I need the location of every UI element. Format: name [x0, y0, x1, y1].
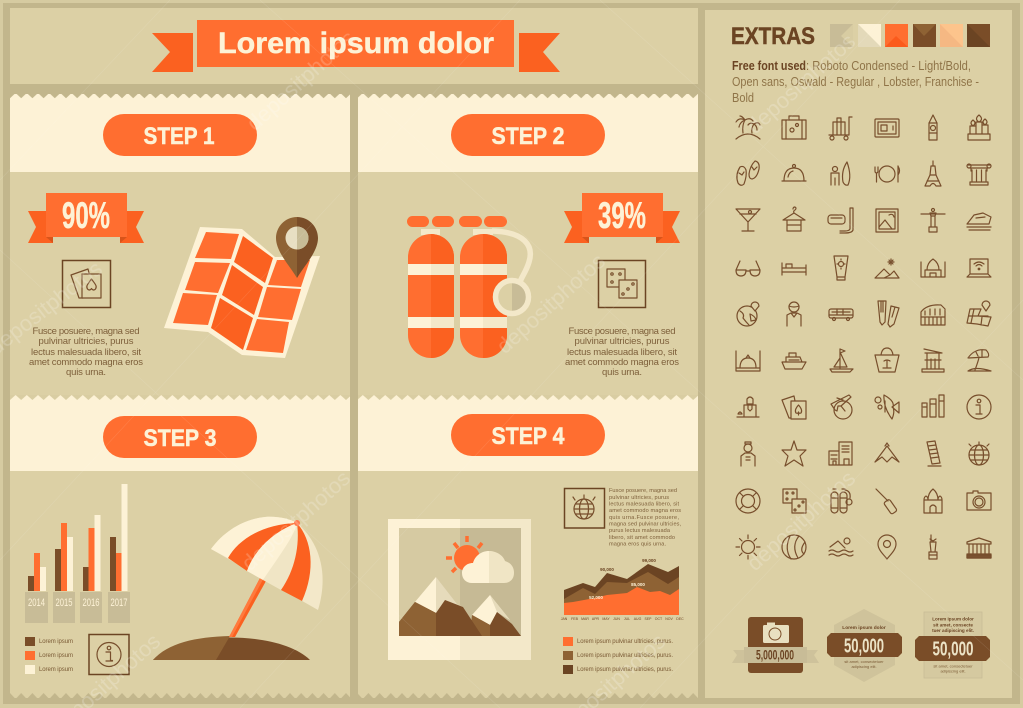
icon: dice box	[598, 260, 646, 308]
text block step 4: amet commodo magna eros	[609, 508, 681, 514]
icon: globe box	[564, 488, 604, 528]
umbrella illustration	[153, 517, 323, 660]
icon: playing cards box	[62, 260, 110, 308]
icon: lifebuoy	[736, 489, 760, 513]
map pin	[276, 217, 318, 278]
colour swatches	[830, 24, 990, 47]
icon: reception	[737, 397, 759, 417]
body text 1: pulvinar ultricies, purus	[38, 336, 134, 347]
body text 2: quis urna.	[602, 367, 642, 378]
badge: hexagon 50,000: sit amet, consectetuer	[844, 659, 884, 664]
chart legend: Lorem ipsum	[39, 667, 73, 673]
step 4 label: STEP 4	[492, 423, 565, 450]
free font note: Free font used	[732, 58, 806, 73]
cloud	[462, 551, 514, 583]
step 2 pill	[451, 114, 605, 156]
zigzag edges	[10, 84, 698, 704]
free font note: Bold	[732, 90, 754, 105]
area chart: JUL	[624, 617, 630, 621]
text block step 4: Fusce posuere, magna sed	[609, 488, 677, 494]
area chart legend	[563, 637, 673, 674]
icon: diving fins	[878, 301, 899, 327]
body text 2: pulvinar ultricies, purus	[574, 336, 670, 347]
icon: statue of liberty	[929, 535, 937, 559]
badge: camera 5,000,000: 5,000,000	[756, 646, 794, 662]
icon: leaning tower	[927, 441, 941, 466]
watermark: depositphotos	[742, 465, 860, 576]
area chart: AUG	[634, 617, 642, 621]
panel: step 1	[10, 94, 350, 398]
area chart: 90,000	[600, 567, 614, 572]
text block step 4: purus lectus malesuada	[609, 528, 671, 534]
ribbon 39%	[564, 193, 680, 243]
icon: plate and cutlery	[875, 166, 900, 182]
icon: big ben	[929, 115, 937, 140]
area chart: FEB	[571, 617, 579, 621]
body text 2: lectus malesuada libero, sit	[567, 347, 677, 358]
icon: concierge	[787, 302, 801, 326]
icon: colosseum	[921, 305, 945, 325]
badge: square 50,000: sit amet, consecte	[933, 622, 973, 628]
badge: square 50,000: sit amet, consectetuer	[933, 664, 973, 668]
step 4 pill	[451, 414, 605, 456]
watermark: depositphotos	[237, 465, 355, 576]
icon: tent	[875, 443, 899, 462]
body text 1	[29, 326, 143, 378]
icon: bellhop	[741, 442, 755, 466]
text block step 4: magna eros quis urna.	[609, 542, 666, 548]
watermark: depositphotos	[492, 248, 610, 359]
bar chart	[25, 484, 130, 623]
badge: camera 5,000,000	[732, 617, 819, 673]
title ribbon right tail	[519, 33, 560, 72]
icon: snorkel	[828, 208, 853, 233]
badge: hexagon 50,000: adipiscing elit.	[851, 664, 877, 669]
badge: hexagon 50,000: 50,000	[844, 636, 884, 658]
icon: playing cards	[782, 396, 806, 419]
badge: square 50,000: 50,000	[932, 638, 974, 660]
icon: swimmer	[829, 538, 853, 556]
icon: camera	[967, 491, 991, 510]
icon: martini	[736, 209, 760, 231]
text block step 4: magna sed pulvinar ultricies,	[609, 522, 681, 528]
area chart: OCT	[655, 617, 663, 621]
icon: info box	[89, 634, 129, 674]
icon: cruise ship	[782, 353, 806, 369]
island	[153, 638, 310, 660]
icon: eiffel tower	[925, 161, 941, 186]
icon: parthenon	[967, 538, 991, 558]
icon: taj mahal	[921, 259, 945, 277]
icon: ionic column	[967, 164, 991, 185]
icon: onion domes	[968, 115, 990, 140]
badge: square 50,000: adipiscing elit.	[940, 668, 966, 674]
body text 2: Fusce posuere, magna sed	[568, 326, 676, 337]
free font note	[732, 58, 979, 105]
icon: person with surfboard	[831, 162, 850, 185]
icon: beach umbrella	[968, 350, 991, 371]
icon: dice	[783, 489, 806, 513]
body text 1: lectus malesuada libero, sit	[31, 347, 141, 358]
camera glyph	[763, 622, 789, 643]
badge: hexagon 50,000	[827, 609, 902, 682]
area chart legend: Lorem ipsum pulvinar ultricies, purus.	[577, 667, 673, 673]
badge: hexagon 50,000: Lorem ipsum dolor	[842, 625, 886, 631]
step 3 pill	[103, 416, 257, 458]
icon: flip flops	[737, 161, 759, 185]
area chart: JUN	[613, 617, 620, 621]
icon: sailboat	[830, 349, 853, 372]
area chart: NOV	[665, 617, 673, 621]
ribbon 39%: 39%	[598, 195, 646, 236]
body text 1: Fusce posuere, magna sed	[32, 326, 140, 337]
area chart	[561, 558, 684, 621]
step 2 label: STEP 2	[492, 123, 564, 150]
badge: square 50,000: tuer adipiscing elit.	[932, 628, 974, 633]
title: Lorem ipsum dolor	[218, 27, 494, 60]
badge: square 50,000	[915, 612, 990, 678]
photo illustration	[388, 519, 531, 660]
text block step 4: libero, sit amet commodo	[609, 535, 675, 541]
free font note: Open sans, Oswald - Regular , Lobster, Franchise -	[732, 74, 979, 89]
area chart: 99,000	[642, 558, 656, 563]
body text 1: amet commodo magna eros	[29, 357, 143, 368]
panel: step 2	[358, 94, 698, 398]
chart legend: Lorem ipsum	[39, 653, 73, 659]
icon: mosque	[736, 351, 760, 371]
icon: luggage cart	[829, 117, 852, 140]
step 1 label: STEP 1	[144, 123, 214, 150]
title ribbon left tail	[152, 33, 193, 72]
text block step 4	[609, 488, 681, 548]
bar chart: 2015	[56, 597, 72, 609]
icon: picture frame	[876, 209, 898, 232]
area chart: APR	[592, 617, 600, 621]
title banner	[197, 20, 514, 67]
body text 1: quis urna.	[66, 367, 106, 378]
text block step 4: lectus malesuada libero, sit	[609, 502, 679, 508]
text block step 4: quis urna.Fusce posuere,	[609, 515, 679, 521]
step 3 label: STEP 3	[144, 425, 216, 452]
canopy	[211, 517, 323, 610]
icon: christ statue	[921, 208, 945, 232]
step 1 pill	[103, 114, 257, 156]
icon: roller suitcase	[876, 489, 897, 514]
scuba tanks illustration	[407, 216, 530, 358]
bar chart: 2014	[28, 597, 45, 609]
watermark: depositphotos	[242, 25, 360, 136]
panel: step 4	[358, 395, 698, 704]
badge: square 50,000: Lorem ipsum dolor	[932, 616, 974, 622]
panel: step 3	[10, 395, 350, 704]
panel: extras	[705, 10, 1012, 698]
chart legend	[25, 637, 73, 674]
icon: beach ball	[782, 535, 806, 559]
area chart: MAY	[602, 617, 610, 621]
icon: palm island	[736, 116, 760, 139]
icon: location pin	[878, 535, 896, 559]
icon: towel hanger	[783, 207, 805, 231]
icon: sun	[736, 535, 760, 559]
body text 2: amet commodo magna eros	[565, 357, 679, 368]
area chart: JAN	[561, 617, 568, 621]
area chart legend: Lorem ipsum pulvinar ultricies, purus.	[577, 653, 673, 659]
bar chart: 2017	[110, 597, 128, 609]
icon: cloche	[782, 164, 806, 181]
icon: bed	[782, 263, 806, 275]
icon: domed castle	[924, 489, 942, 513]
icon: laptop	[967, 259, 991, 277]
icon: plane over globe	[831, 395, 852, 419]
area chart: 85,000	[631, 582, 645, 587]
mountains	[399, 577, 521, 636]
free font note: : Roboto Condensed - Light/Bold,	[806, 58, 971, 73]
icon: torii	[922, 349, 944, 372]
text block step 4: pulvinar ultricies, purus	[609, 495, 669, 501]
icon: starfish	[782, 441, 806, 466]
area chart: 52,000	[589, 595, 603, 600]
body text 2	[565, 326, 679, 378]
icon: yacht	[967, 213, 991, 230]
icon: sunscreen	[834, 256, 848, 280]
ribbon 90%	[28, 193, 144, 243]
bar chart: 2016	[82, 597, 100, 609]
icon: fish	[875, 395, 899, 419]
hose and gauge	[492, 231, 530, 314]
icon: info	[967, 395, 991, 419]
header panel	[10, 8, 698, 84]
area chart: DEC	[676, 617, 684, 621]
pole	[229, 578, 266, 637]
icon: map with pin	[967, 301, 991, 326]
extras heading: EXTRAS	[731, 23, 815, 50]
area chart: SEP	[644, 617, 652, 621]
icon: beach bag	[875, 348, 899, 372]
map illustration	[164, 217, 320, 358]
icon: bus	[829, 309, 853, 320]
icon: disco globe	[969, 442, 989, 465]
watermark: depositphotos	[742, 28, 860, 139]
icon: safe	[875, 119, 899, 137]
area chart legend: Lorem ipsum pulvinar ultricies, purus.	[577, 639, 673, 645]
icon: pyramids	[875, 259, 899, 278]
ribbon 90%: 90%	[62, 195, 110, 236]
icon: scuba tanks	[831, 489, 852, 513]
icon: sunglasses	[736, 261, 760, 276]
icon grid	[736, 115, 991, 559]
icon: moai	[922, 395, 944, 417]
icon: suitcase	[782, 116, 806, 139]
icon: globe and pin	[737, 302, 759, 326]
sun	[446, 536, 482, 572]
area chart: MAR	[581, 617, 589, 621]
icon: hotel building	[829, 442, 852, 465]
chart legend: Lorem ipsum	[39, 639, 73, 645]
